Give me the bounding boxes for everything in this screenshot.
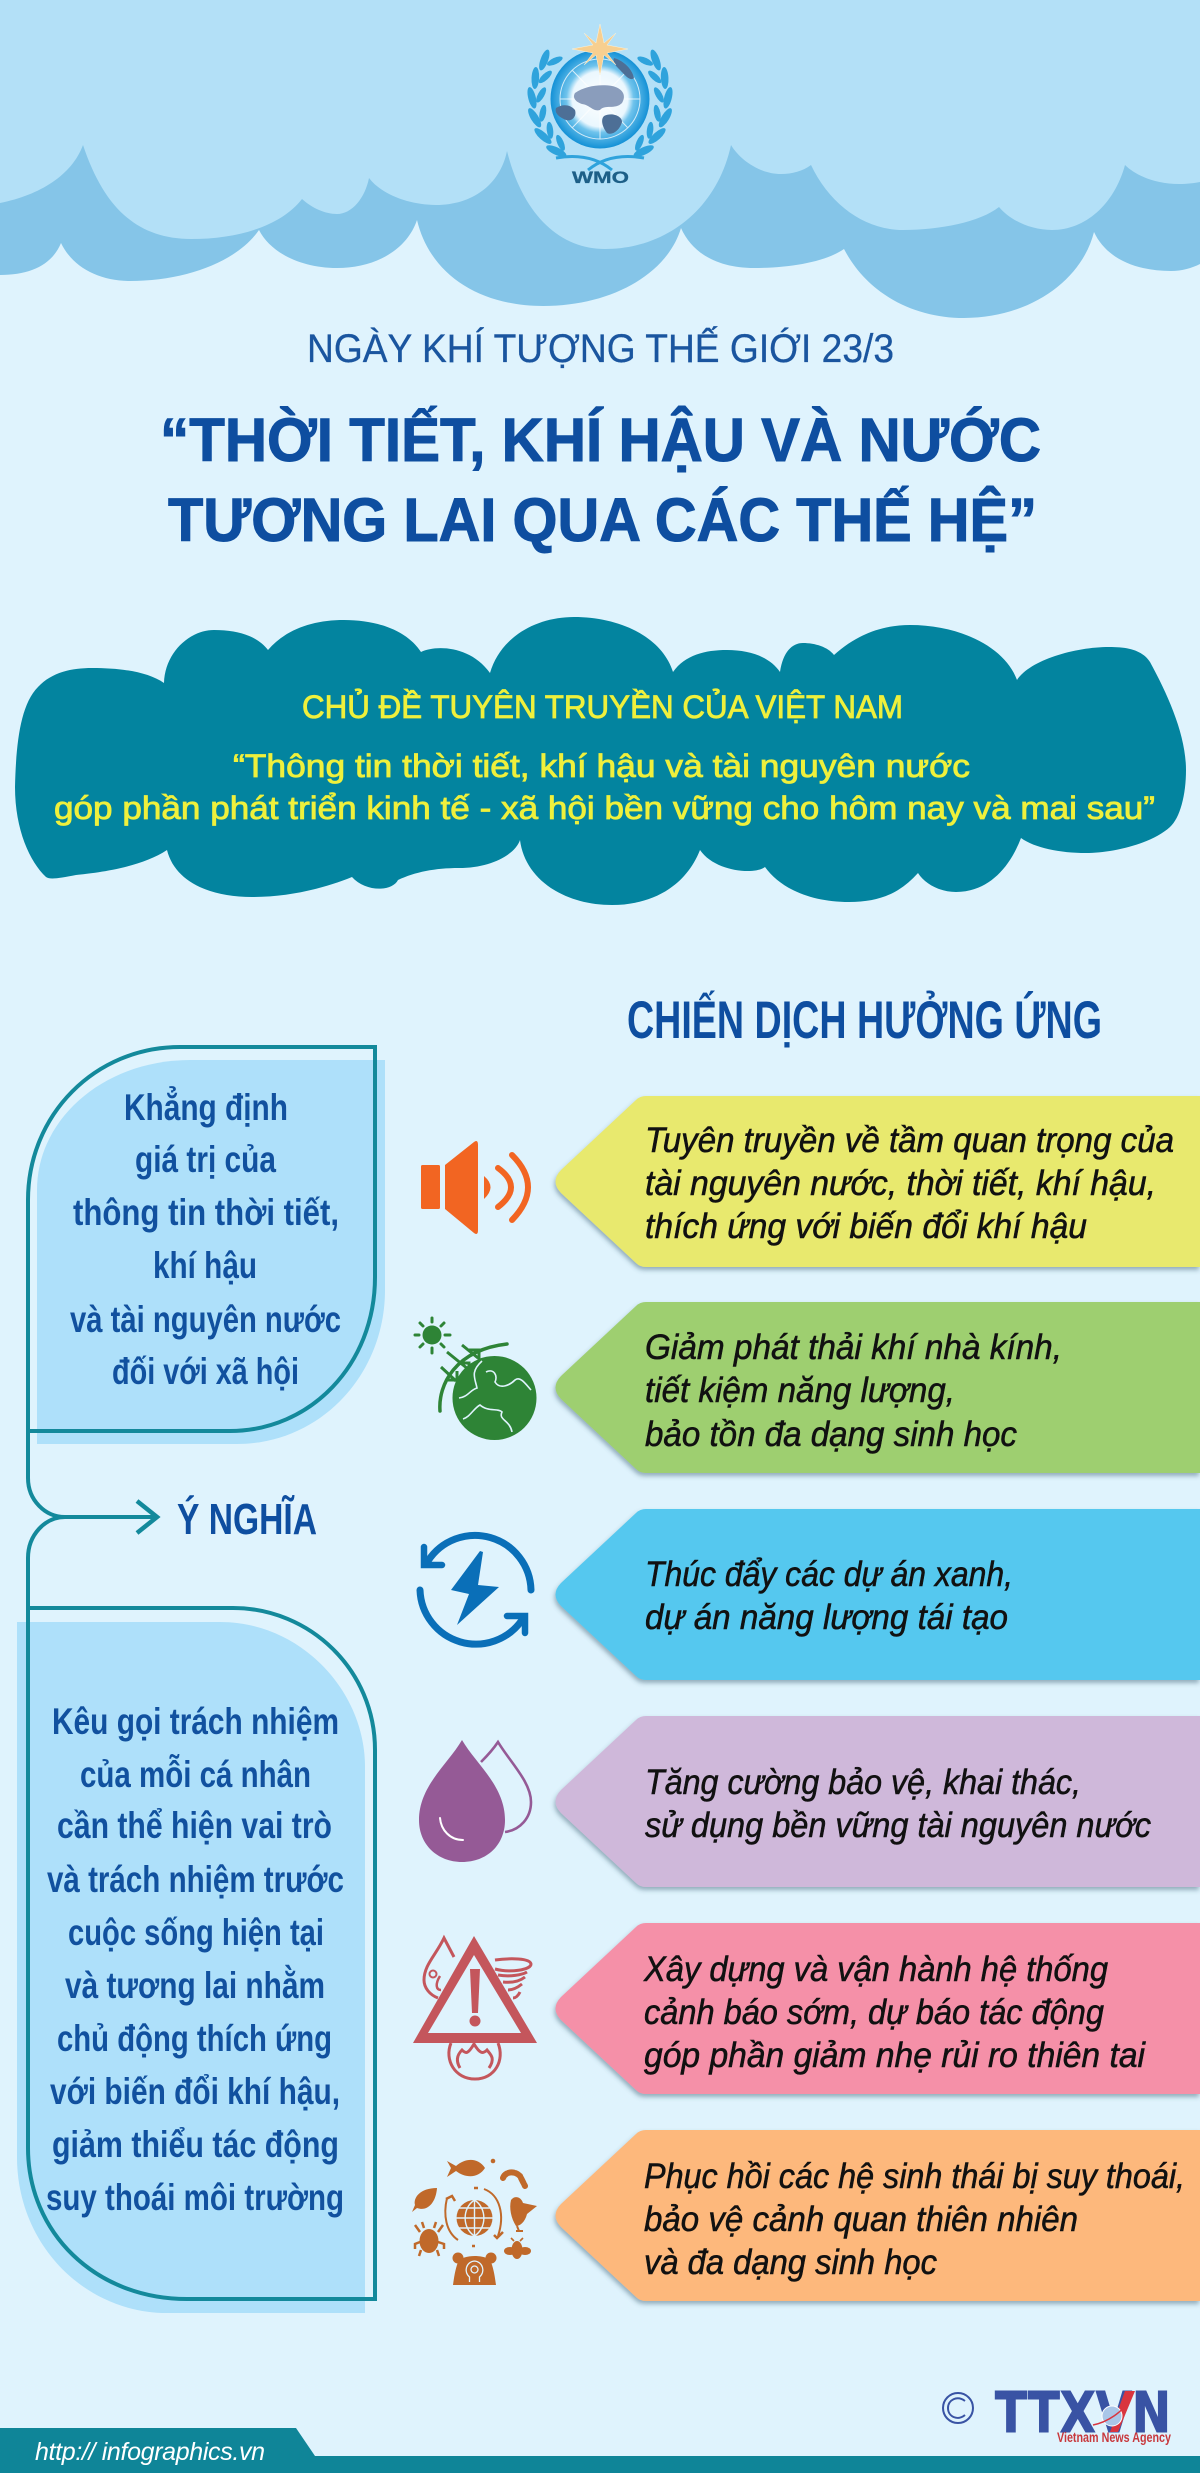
icon: ecosystem <box>412 2159 537 2285</box>
campaign item 2: Giảm phát thải khí nhà kính, <box>645 1328 1062 1367</box>
text: meaning 2: của mỗi cá nhân <box>80 1754 311 1795</box>
text: meaning 1: thông tin thời tiết, <box>73 1192 339 1233</box>
text: meaning 1: đối với xã hội <box>112 1351 299 1392</box>
campaign item 4: Tăng cường bảo vệ, khai thác, <box>645 1763 1081 1802</box>
campaign item 6: và đa dạng sinh học <box>644 2243 937 2282</box>
text: meaning 1: và tài nguyên nước <box>70 1299 341 1340</box>
text: meaning 2: cần thể hiện vai trò <box>57 1805 332 1846</box>
text: meaning 1: khí hậu <box>153 1245 257 1286</box>
theme heading: CHỦ ĐỀ TUYÊN TRUYỀN CỦA VIỆT NAM <box>302 689 903 725</box>
campaign item 3: dự án năng lượng tái tạo <box>645 1598 1008 1637</box>
campaign item 2: tiết kiệm năng lượng, <box>645 1371 955 1410</box>
text: meaning 1: giá trị của <box>135 1139 276 1180</box>
main title <box>160 406 1041 554</box>
icon: speaker <box>421 1141 528 1234</box>
campaign item 1 <box>556 1096 1200 1267</box>
campaign item 1: Tuyên truyền về tầm quan trọng của <box>645 1121 1174 1160</box>
campaign item 6 <box>556 2130 1200 2301</box>
connector outline with arrow <box>28 1047 375 2299</box>
main title: TƯƠNG LAI QUA CÁC THẾ HỆ” <box>168 486 1037 554</box>
subtitle: NGÀY KHÍ TƯỢNG THẾ GIỚI 23/3 <box>307 325 894 371</box>
icon: sun and earth <box>415 1318 536 1440</box>
text: meaning 2: và tương lai nhằm <box>65 1964 325 2006</box>
text: meaning 2: và trách nhiệm trước <box>47 1859 344 1900</box>
label: meaning: Ý NGHĨA <box>177 1494 317 1544</box>
header clouds <box>0 0 1200 318</box>
copyright symbol <box>943 2393 973 2423</box>
text: meaning 1: Khẳng định <box>124 1086 288 1128</box>
text: meaning 2: cuộc sống hiện tại <box>68 1912 324 1953</box>
campaign item 3 <box>556 1509 1200 1680</box>
icon: disaster warning <box>413 1936 537 2079</box>
theme quote: “Thông tin thời tiết, khí hậu và tài nguyên nước <box>233 748 970 784</box>
campaign item 3: Thúc đẩy các dự án xanh, <box>645 1555 1013 1594</box>
icon: renewable energy <box>420 1535 531 1644</box>
panel: meaning 1 fill <box>37 1060 385 1444</box>
TTXVN logo: TTXVN <box>995 2381 1171 2446</box>
panel: Vietnam theme cloud <box>15 617 1186 905</box>
icon: water drops <box>419 1740 531 1862</box>
campaign item 4: sử dụng bền vững tài nguyên nước <box>645 1806 1151 1845</box>
campaign item 4 <box>556 1716 1200 1887</box>
campaign item 1: thích ứng với biến đổi khí hậu <box>645 1207 1087 1246</box>
main title: “THỜI TIẾT, KHÍ HẬU VÀ NƯỚC <box>160 406 1041 474</box>
panel: meaning 2 fill <box>17 1622 365 2313</box>
campaign item 5: góp phần giảm nhẹ rủi ro thiên tai <box>644 2036 1146 2075</box>
text: meaning 2 <box>46 1701 344 2218</box>
text: meaning 1 <box>70 1086 341 1392</box>
WMO wordmark: WMO <box>572 168 629 187</box>
text: meaning 2: Kêu gọi trách nhiệm <box>52 1701 339 1742</box>
text: meaning 2: suy thoái môi trường <box>46 2177 344 2218</box>
campaign item 1: tài nguyên nước, thời tiết, khí hậu, <box>645 1164 1156 1203</box>
theme quote: góp phần phát triển kinh tế - xã hội bền vững cho hôm nay và mai sau” <box>54 790 1155 826</box>
campaign item 2 <box>556 1302 1200 1473</box>
text: meaning 2: giảm thiểu tác động <box>52 2124 339 2165</box>
campaign item 2: bảo tồn đa dạng sinh học <box>645 1415 1017 1454</box>
campaign item 5: Xây dựng và vận hành hệ thống <box>643 1950 1108 1989</box>
campaign item 5 <box>556 1923 1200 2094</box>
campaign item 6: bảo vệ cảnh quan thiên nhiên <box>644 2200 1078 2239</box>
icon: WMO logo <box>526 24 674 187</box>
text: meaning 2: chủ động thích ứng <box>57 2018 332 2059</box>
text: meaning 2: với biến đổi khí hậu, <box>50 2071 340 2112</box>
website url: http:// infographics.vn <box>35 2438 265 2466</box>
footer bar <box>0 2428 1200 2473</box>
campaign item 5: cảnh báo sớm, dự báo tác động <box>644 1993 1104 2032</box>
theme quote <box>54 748 1155 826</box>
